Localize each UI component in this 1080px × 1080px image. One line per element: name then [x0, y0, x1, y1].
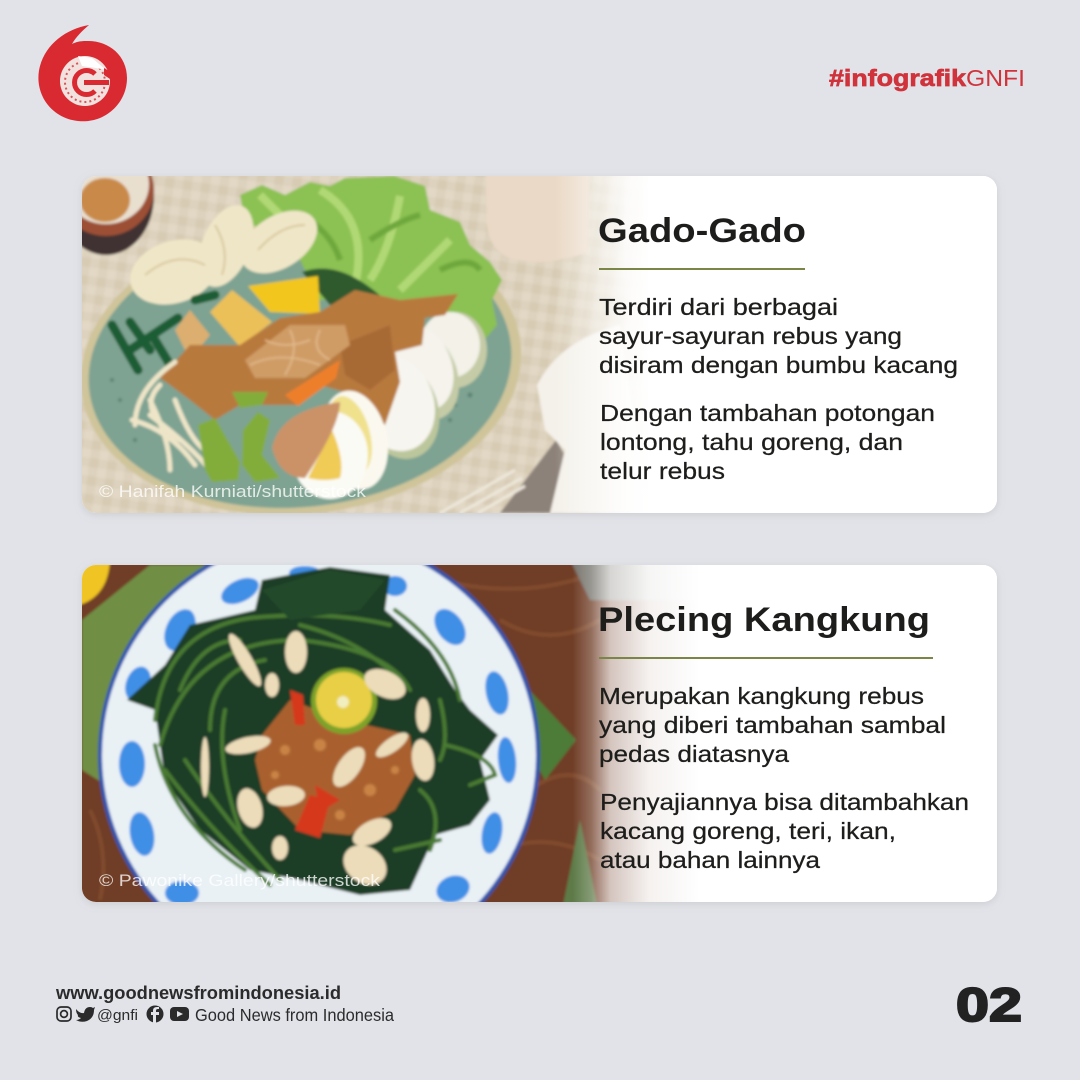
- logo: GNFI: [38, 25, 127, 121]
- panel: Plecing Kangkung: [81, 565, 998, 905]
- bowl and shallots: [82, 176, 156, 256]
- description text: Penyajiannya bisa ditambahkan: [600, 789, 969, 815]
- corn and tofu: [248, 276, 320, 314]
- photo credit: © Hanifah Kurniati/shutterstock: [99, 482, 367, 501]
- hashtag: [829, 65, 1025, 91]
- heading: Gado-Gado: [598, 212, 806, 250]
- lettuce: [240, 176, 502, 345]
- photo fade: [555, 176, 650, 513]
- photo: plecing kangkung bowl: [82, 565, 672, 902]
- bean sprouts: [132, 362, 210, 470]
- description text: disiram dengan bumbu kacang: [599, 352, 958, 378]
- page name: Good News from Indonesia: [195, 1005, 394, 1025]
- peanuts: [201, 631, 437, 893]
- heading rule: [599, 657, 933, 659]
- description text: lontong, tahu goreng, dan: [600, 429, 903, 455]
- description text: Merupakan kangkung rebus: [599, 683, 924, 709]
- description text: sayur-sayuran rebus yang: [599, 323, 902, 349]
- hashtag: #infografik: [829, 65, 967, 91]
- plate: [82, 226, 522, 513]
- description text: kacang goreng, teri, ikan,: [600, 818, 896, 844]
- napkin: [536, 328, 622, 513]
- peanut sauce: [160, 290, 458, 425]
- description text: pedas diatasnya: [599, 741, 789, 767]
- egg: [272, 384, 397, 499]
- description text: Dengan tambahan potongan: [600, 400, 935, 426]
- description text: [599, 683, 969, 873]
- page number: 02: [956, 978, 1022, 1031]
- lontong: [382, 310, 488, 460]
- handle: @gnfi: [97, 1007, 138, 1024]
- heading rule: [599, 268, 805, 270]
- crackers: [130, 204, 320, 306]
- glass: [486, 170, 590, 262]
- website url: www.goodnewsfromindonesia.id: [55, 982, 341, 1003]
- description text: Terdiri dari berbagai: [599, 294, 838, 320]
- blue spots: [119, 566, 518, 907]
- icon: facebook: [146, 1006, 164, 1023]
- description text: atau bahan lainnya: [600, 847, 820, 873]
- description text: yang diberi tambahan sambal: [599, 712, 946, 738]
- description text: telur rebus: [600, 458, 725, 484]
- photo: gado-gado plate: [82, 176, 626, 513]
- green beans: [112, 295, 215, 370]
- heading: Plecing Kangkung: [598, 601, 930, 639]
- photo credit: © Pawonike Gallery/shutterstock: [99, 871, 381, 890]
- icon: instagram: [57, 1007, 71, 1021]
- sambal: [255, 700, 415, 835]
- water spinach: [127, 567, 498, 895]
- social row: [57, 1005, 394, 1025]
- hashtag: GNFI: [966, 65, 1025, 91]
- photo fade: [572, 565, 700, 902]
- bitter melon: [198, 392, 280, 482]
- banana leaf: [82, 565, 206, 782]
- white text area: [699, 565, 997, 902]
- panel: Gado-Gado: [81, 176, 998, 516]
- lime slice: [82, 565, 112, 606]
- lime half: [311, 668, 377, 734]
- bowl: [96, 565, 542, 902]
- icon: twitter: [76, 1007, 95, 1022]
- description text: [599, 294, 958, 484]
- icon: youtube: [170, 1007, 189, 1021]
- white text area: [649, 176, 997, 513]
